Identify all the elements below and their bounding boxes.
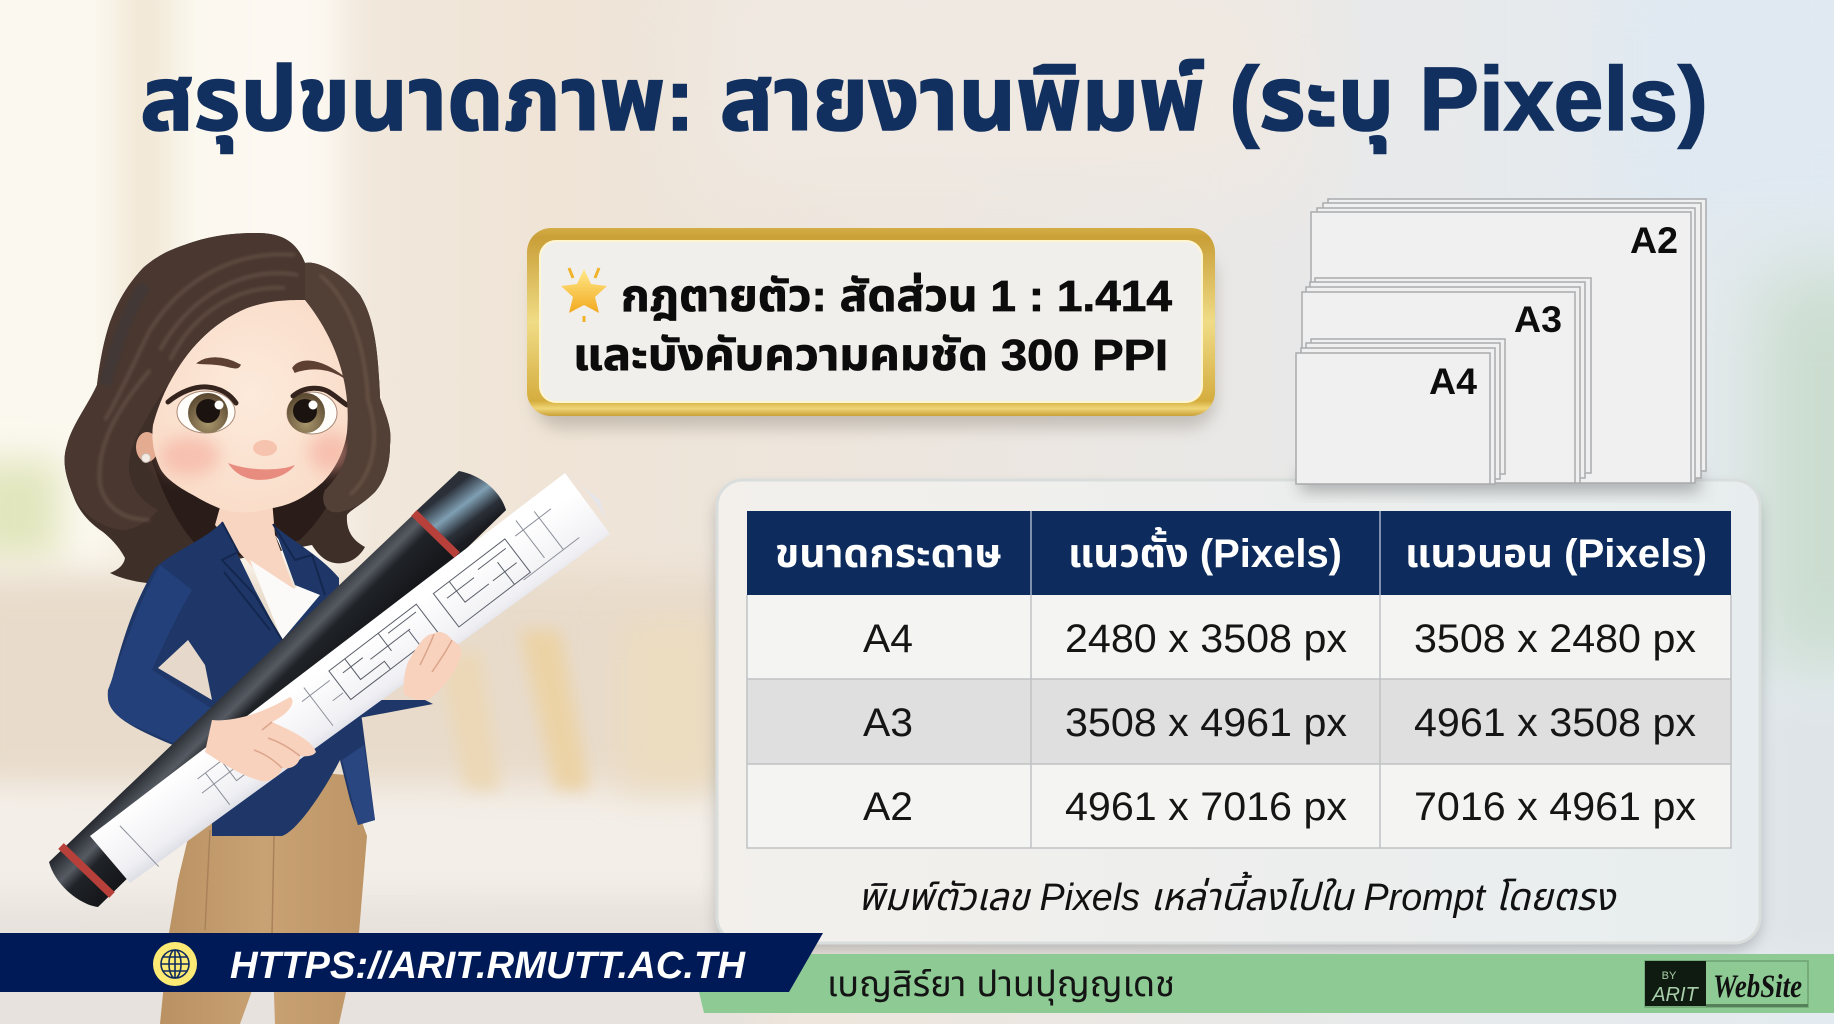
paper size stacks — [1296, 199, 1706, 492]
character eyes — [168, 387, 347, 434]
logo: ARIT — [1651, 984, 1700, 1006]
table header labels: ขนาดกระดาษ — [775, 532, 1002, 576]
logo: WebSite — [1713, 969, 1802, 1005]
arm gap — [158, 640, 212, 700]
character face — [152, 299, 352, 513]
character tube — [49, 471, 506, 907]
paper A4 — [1296, 339, 1505, 484]
table values: 4961 x 7016 px — [1065, 785, 1347, 829]
character inner shadow hair — [150, 430, 350, 560]
paper A4: A4 — [1429, 361, 1477, 402]
table values: 7016 x 4961 px — [1414, 785, 1696, 829]
character back hair — [65, 233, 391, 584]
character nose — [253, 440, 277, 456]
character earring — [142, 454, 150, 462]
table values: 2480 x 3508 px — [1065, 617, 1347, 661]
table note: พิมพ์ตัวเลข Pixels เหล่านี้ลงไปใน Prompt โดยตรง — [858, 871, 1617, 919]
callout text: และบังคับความคมชัด 300 PPI — [573, 331, 1168, 380]
icon: globe — [153, 942, 197, 986]
table values: A3 — [863, 701, 913, 745]
logo — [1645, 961, 1808, 1007]
icon: star — [561, 268, 607, 322]
character blueprint roll — [90, 473, 610, 883]
logo: BY — [1662, 970, 1677, 982]
character blazer — [108, 522, 433, 836]
character brows — [198, 358, 345, 378]
paper A3: A3 — [1514, 299, 1562, 340]
callout text: กฎตายตัว: สัดส่วน 1 : 1.414 — [621, 272, 1173, 321]
panel: table card — [717, 480, 1760, 950]
character hand lower — [205, 697, 316, 781]
character hand upper — [404, 632, 462, 700]
table values: A4 — [863, 617, 913, 661]
character neck — [215, 500, 294, 589]
paper A2 — [1311, 199, 1706, 483]
footer: green author bar — [690, 954, 1834, 1013]
author name: เบญสิร์ยา ปานปุญญเดช — [827, 963, 1175, 1005]
character: woman holding tube and blueprint roll — [49, 233, 610, 1024]
character front hair — [65, 233, 391, 530]
callout text — [573, 272, 1173, 380]
character ear — [136, 432, 158, 462]
table header — [747, 511, 1731, 595]
title: สรุปขนาดภาพ: สายงานพิมพ์ (ระบุ Pixels) — [140, 50, 1708, 154]
table header labels: แนวตั้ง (Pixels) — [1068, 526, 1342, 576]
table values: 4961 x 3508 px — [1414, 701, 1696, 745]
table values: A2 — [863, 785, 913, 829]
footer: navy URL bar — [0, 933, 823, 992]
character pants — [160, 770, 367, 1024]
table header labels: แนวนอน (Pixels) — [1405, 532, 1707, 576]
character shirt — [250, 535, 325, 640]
gold rule callout — [527, 228, 1215, 428]
url text: HTTPS://ARIT.RMUTT.AC.TH — [230, 945, 747, 987]
table — [747, 511, 1731, 848]
table values: 3508 x 4961 px — [1065, 701, 1347, 745]
character mouth — [228, 463, 295, 480]
table values — [863, 617, 1696, 829]
paper A3 — [1302, 278, 1591, 483]
table header labels — [775, 526, 1707, 576]
table values: 3508 x 2480 px — [1414, 617, 1696, 661]
paper A2: A2 — [1630, 220, 1678, 261]
table rows — [747, 595, 1731, 679]
